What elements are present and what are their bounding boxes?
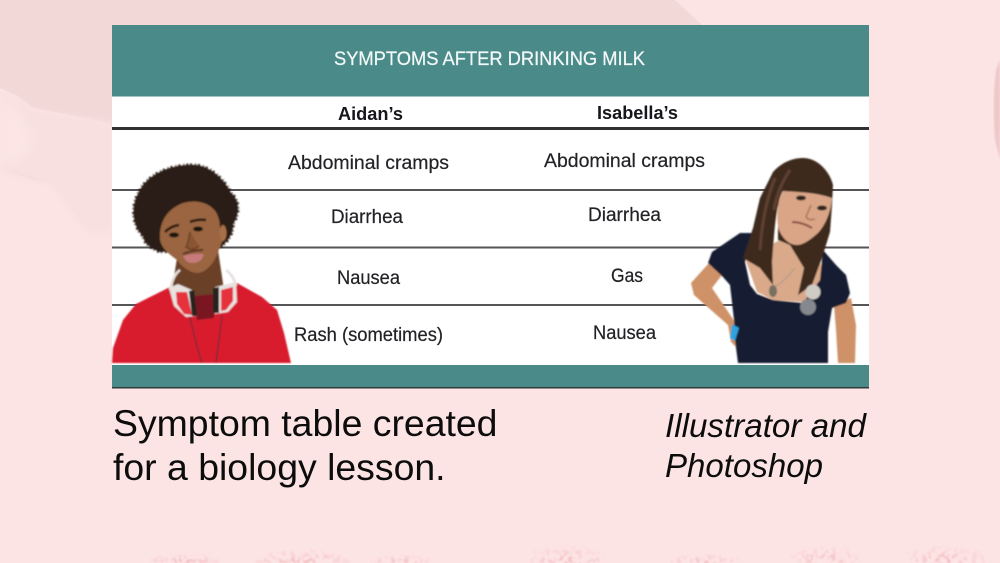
right arm: [834, 298, 856, 363]
bracelet: [730, 324, 739, 341]
tools credit: Photoshop: [665, 447, 823, 484]
left arm: [691, 263, 750, 354]
column: Aidan's symptoms: [288, 153, 449, 346]
column: Aidan's symptoms: Diarrhea: [331, 207, 403, 228]
hair: [134, 165, 238, 252]
necklace: [773, 268, 795, 288]
photo: Aidan with headphones: [112, 165, 291, 363]
symptom table panel: [112, 25, 869, 388]
chest skin: [745, 240, 825, 302]
column: Isabella's symptoms: Nausea: [593, 323, 656, 344]
headband arms: [170, 270, 236, 290]
neck: [172, 250, 224, 312]
table footer band: [112, 365, 869, 387]
eyebrows: [165, 220, 206, 232]
tools credit: Illustrator and: [665, 407, 868, 444]
shirt flowers: [806, 284, 820, 300]
column: Isabella's symptoms: Abdominal cramps: [544, 151, 705, 172]
eyes: [169, 232, 179, 238]
caption: [113, 402, 497, 488]
table title: SYMPTOMS AFTER DRINKING MILK: [334, 48, 645, 70]
nose: [186, 232, 199, 249]
photo: Isabella with hand on hip: [691, 158, 856, 363]
shirt: [708, 233, 850, 363]
table header band: [112, 25, 869, 96]
hair: [743, 158, 833, 295]
face: [777, 191, 832, 245]
hair highlights: [760, 170, 790, 250]
nose and mouth: [806, 205, 815, 220]
moustache and mouth: [183, 250, 203, 254]
headphone cord: [190, 315, 222, 363]
column: Aidan's symptoms: Nausea: [337, 268, 400, 289]
sweater: [112, 283, 291, 363]
column: Isabella's symptoms: [544, 151, 705, 344]
caption: Symptom table created: [113, 402, 497, 444]
face: [160, 201, 225, 273]
column: Isabella's symptoms: Gas: [611, 266, 643, 287]
caption: for a biology lesson.: [113, 446, 446, 488]
ear: [220, 225, 226, 241]
tools credit: [665, 407, 868, 484]
column headings: [338, 102, 678, 124]
column: Isabella's symptoms: Diarrhea: [588, 205, 661, 226]
sweater collar: [194, 294, 214, 320]
column headings: Aidan’s: [338, 103, 403, 124]
right ear cup: [215, 282, 237, 314]
column headings: Isabella’s: [597, 102, 678, 123]
column: Aidan's symptoms: Rash (sometimes): [294, 325, 443, 346]
left ear cup: [169, 284, 197, 317]
eyes: [796, 196, 806, 200]
column: Aidan's symptoms: Abdominal cramps: [288, 153, 449, 174]
